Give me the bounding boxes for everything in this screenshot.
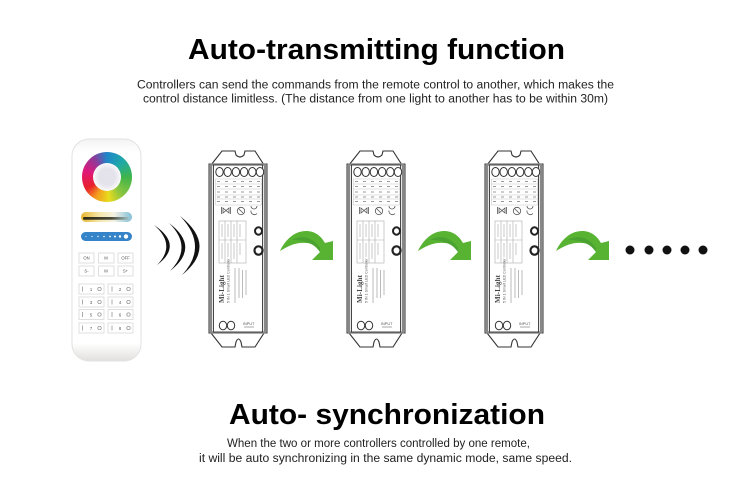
model label: 5 IN 1 Smart LED Controller [226, 257, 230, 303]
buttons [79, 253, 133, 333]
button labels: 2 [119, 287, 122, 292]
button labels: 1 [90, 287, 93, 292]
CCT slider [81, 212, 132, 222]
arrow 3 [556, 231, 609, 260]
input label: INPUT [243, 322, 255, 326]
model label: 5 IN 1 Smart LED Controller [502, 257, 506, 303]
button labels: M [104, 256, 108, 260]
synchronization text: it will be auto synchronizing in the same dynamic mode, same speed. [199, 453, 572, 465]
controller 1 [209, 151, 267, 347]
description text: Controllers can send the commands from the remote control to another, which makes the [137, 80, 614, 92]
brand label: Mi-Light [218, 274, 226, 303]
button labels: OFF [121, 256, 130, 260]
heading: auto synchronization: Auto- synchronization [229, 399, 545, 431]
button labels: S- [84, 268, 89, 274]
synchronization text [199, 438, 572, 465]
controller 2 [347, 151, 405, 347]
input label: INPUT [519, 322, 531, 326]
arrow 2 [418, 231, 471, 260]
button labels [83, 256, 130, 331]
icon: wireless signal waves [154, 216, 200, 275]
continuation dots [626, 246, 708, 254]
button labels: 7 [90, 326, 93, 331]
button labels: S+ [123, 268, 129, 274]
arrow 1 [280, 231, 333, 260]
synchronization text: When the two or more controllers controlled by one remote, [227, 438, 530, 450]
button labels: 8 [119, 326, 122, 331]
controller 3 [485, 151, 543, 347]
description text: control distance limitless. (The distance from one light to another has to be within 30m) [143, 94, 608, 106]
model label: 5 IN 1 Smart LED Controller [364, 257, 368, 303]
button labels: 6 [119, 312, 122, 318]
button labels: 4 [119, 300, 122, 305]
brightness slider [81, 232, 132, 241]
input label: INPUT [381, 322, 393, 326]
description text [137, 80, 614, 106]
button labels: M [104, 268, 108, 274]
icon: colour wheel [82, 152, 132, 202]
button labels: ON [83, 256, 90, 260]
title: Auto-transmitting function [188, 34, 565, 66]
zone button marks [82, 286, 130, 330]
brand label: Mi-Light [494, 274, 502, 303]
remote control [72, 139, 141, 361]
brand label: Mi-Light [356, 274, 364, 303]
button labels: 3 [90, 300, 93, 305]
button labels: 5 [90, 312, 93, 318]
